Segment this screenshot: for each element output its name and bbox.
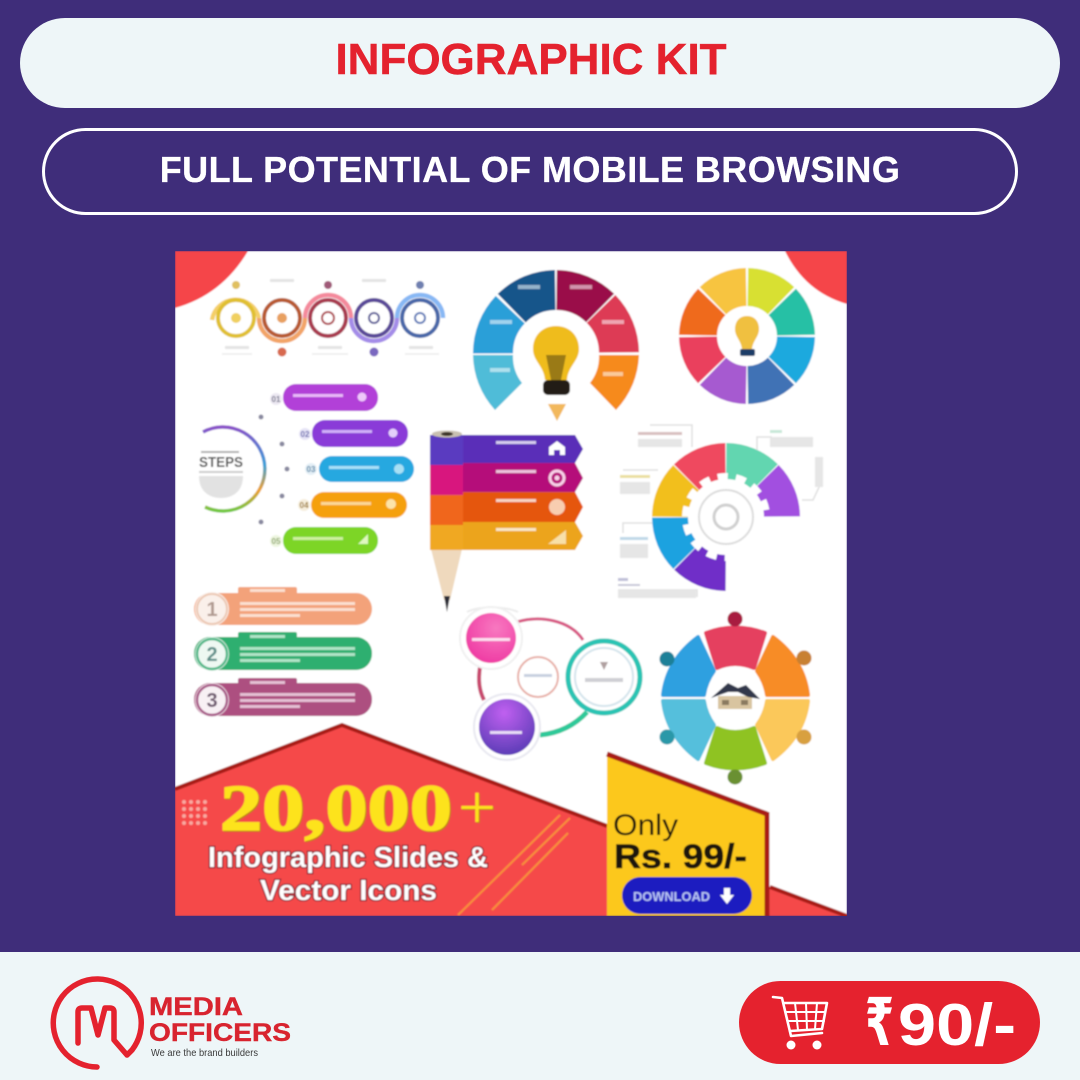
serpentine step timeline xyxy=(212,279,443,356)
download button: DOWNLOAD xyxy=(633,890,710,904)
teal ring xyxy=(568,641,640,713)
pencil tip xyxy=(431,549,462,600)
ring diagram with bulb xyxy=(678,267,816,405)
pill 01 xyxy=(270,384,378,411)
gear segment chart xyxy=(618,425,823,598)
pill 04: 04 xyxy=(300,501,309,510)
pill 05 xyxy=(270,527,378,554)
logo wordmark: OFFICERS xyxy=(149,1019,291,1047)
wheel segments xyxy=(472,269,640,354)
yellow price box xyxy=(607,754,767,916)
price text xyxy=(865,985,1016,1059)
banner 2 xyxy=(194,632,372,671)
callout text blocks xyxy=(618,430,823,598)
six-petal house chart xyxy=(660,612,812,784)
banner 2: 2 xyxy=(206,644,218,666)
logo wordmark xyxy=(149,993,291,1047)
steps ring xyxy=(199,427,265,511)
download button xyxy=(622,877,752,914)
pencil with ribbon banners xyxy=(430,430,583,612)
ribbon banners xyxy=(463,435,583,550)
pill 03: 03 xyxy=(306,465,316,474)
subheading xyxy=(208,842,488,907)
small centre ring xyxy=(518,657,558,697)
headline 20,000+: 20,000 xyxy=(220,772,452,845)
pill 03 xyxy=(305,456,414,482)
red promo panel xyxy=(175,725,847,916)
headline 20,000+: + xyxy=(458,774,496,842)
subheading: Vector Icons xyxy=(260,875,437,907)
connected circles diagram xyxy=(460,607,640,760)
logo wordmark: MEDIA xyxy=(149,993,243,1021)
red corner top-left xyxy=(175,251,248,308)
steps ring: STEPS xyxy=(199,454,243,471)
pill 05: 05 xyxy=(272,537,281,546)
banner 3 xyxy=(194,678,372,717)
gear segments xyxy=(651,442,801,592)
title banner xyxy=(20,18,1060,108)
pencil barrel xyxy=(430,430,463,550)
product image xyxy=(175,251,847,916)
banner 3: 3 xyxy=(206,690,218,712)
logo tagline: We are the brand builders xyxy=(151,1047,258,1059)
footer band xyxy=(0,952,1080,1080)
price text: ₹ xyxy=(865,985,894,1059)
pill 02: 02 xyxy=(300,430,310,439)
price text: Rs. 99/- xyxy=(614,838,747,876)
dot grid xyxy=(182,800,207,825)
orange diagonal lines xyxy=(458,815,570,915)
title banner: INFOGRAPHIC KIT xyxy=(335,35,727,84)
red corner top-right xyxy=(785,251,847,304)
house icon xyxy=(711,683,760,709)
light bulb xyxy=(533,326,579,421)
callout leaders xyxy=(618,425,821,597)
banner 1 xyxy=(194,587,372,626)
icon: shopping cart xyxy=(773,997,827,1050)
banner 1: 1 xyxy=(206,599,218,621)
price text xyxy=(613,809,747,876)
violet circle xyxy=(479,699,535,755)
connector dots xyxy=(258,414,290,524)
three numbered banners xyxy=(194,587,372,717)
pill 04 xyxy=(298,492,407,518)
pink circle xyxy=(466,613,516,663)
logo: media officers xyxy=(53,979,291,1067)
subtitle banner xyxy=(42,128,1018,215)
pill 01: 01 xyxy=(272,395,281,404)
price text: Only xyxy=(613,809,678,842)
idea wheel with bulb xyxy=(472,269,640,422)
logo mark xyxy=(53,979,141,1067)
bulb icon xyxy=(735,316,759,356)
price pill xyxy=(739,981,1040,1064)
subtitle banner: FULL POTENTIAL OF MOBILE BROWSING xyxy=(160,149,900,190)
numbered pill list with steps ring xyxy=(199,384,414,554)
headline 20,000+ xyxy=(220,772,496,845)
petal badges xyxy=(660,612,812,784)
subheading: Infographic Slides & xyxy=(208,842,488,874)
pill 02 xyxy=(299,420,408,447)
price text: 90/- xyxy=(898,992,1016,1058)
